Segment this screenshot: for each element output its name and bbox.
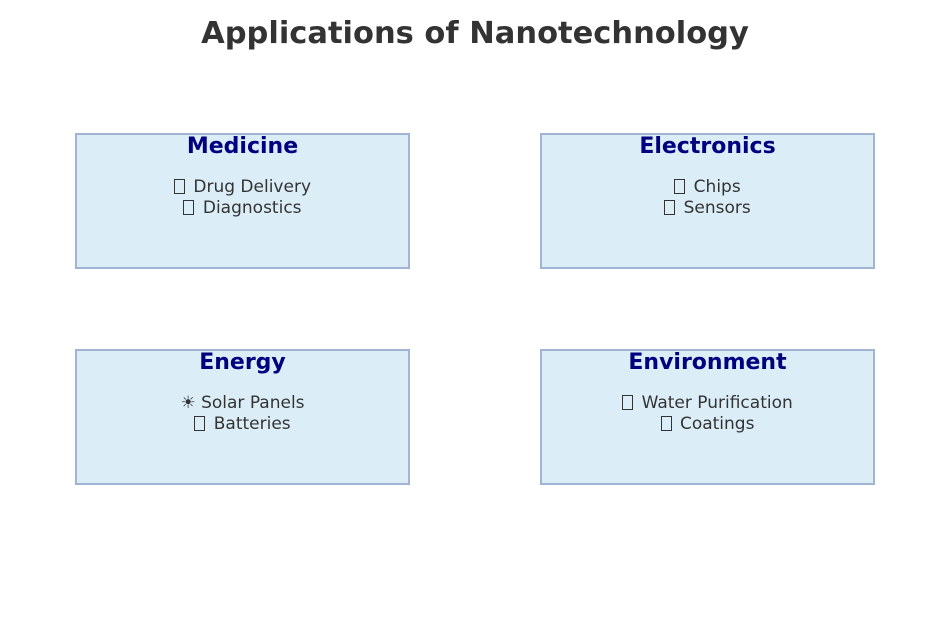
- text: environment items: Coatings: [680, 414, 754, 434]
- text: environment items: Water Purification: [642, 393, 793, 413]
- text: medicine items: Drug Delivery: [193, 177, 311, 197]
- text: energy items: Batteries: [214, 414, 291, 434]
- text: medicine items: Diagnostics: [203, 198, 302, 218]
- text: electronics items: Chips: [694, 177, 741, 197]
- panel: energy: [75, 349, 410, 485]
- heading: energy: Energy: [199, 350, 286, 375]
- text: medicine items: [174, 177, 311, 218]
- panel: environment: [540, 349, 875, 485]
- text: energy items: [180, 393, 305, 434]
- title: Applications of Nanotechnology: [201, 16, 749, 51]
- text: electronics items: [664, 177, 751, 218]
- heading: electronics: Electronics: [639, 134, 776, 159]
- text: electronics items: Sensors: [684, 198, 751, 218]
- text: environment items: [622, 393, 793, 434]
- heading: medicine: Medicine: [187, 134, 298, 159]
- text: energy items: ☀ Solar Panels: [180, 393, 305, 413]
- heading: environment: Environment: [628, 350, 787, 375]
- panel: medicine: [75, 133, 410, 269]
- panel: electronics: [540, 133, 875, 269]
